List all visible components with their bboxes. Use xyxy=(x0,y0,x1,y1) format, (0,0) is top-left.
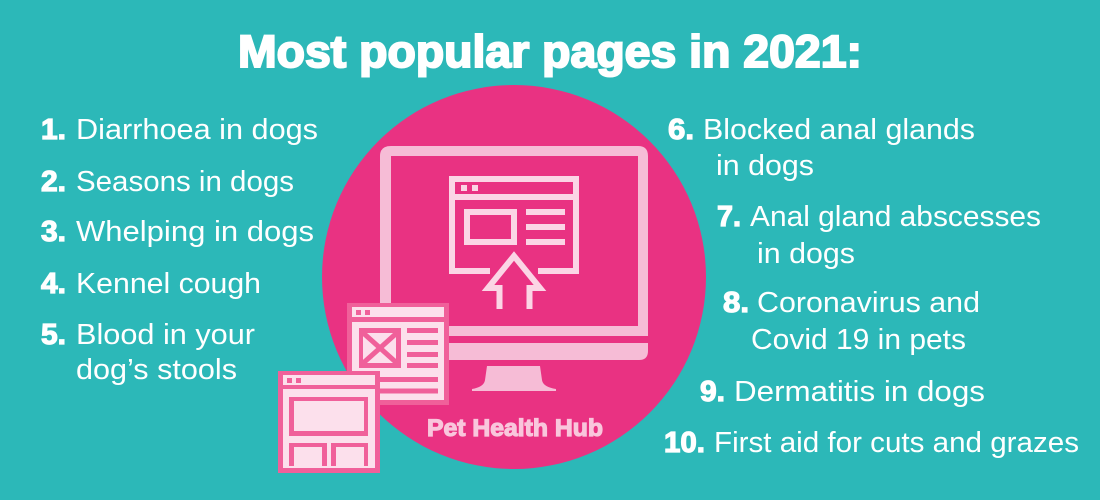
item 3: 3. xyxy=(41,216,66,248)
item 6: 6. xyxy=(668,114,694,146)
item 3: Whelping in dogs xyxy=(76,216,314,248)
item 7: Anal gland abscesses xyxy=(750,201,1041,233)
item 4: 4. xyxy=(41,268,66,300)
item 8: 8. xyxy=(723,287,749,319)
item 8: Coronavirus and xyxy=(757,287,980,319)
item 6: Blocked anal glands xyxy=(703,114,975,146)
item 10: First aid for cuts and grazes xyxy=(714,427,1079,459)
item 9: 9. xyxy=(700,376,725,408)
left list xyxy=(41,114,318,386)
icon: desktop monitor xyxy=(380,146,648,391)
item 7 xyxy=(717,201,1041,270)
item 1: Diarrhoea in dogs xyxy=(76,114,318,146)
item 5: dog’s stools xyxy=(76,354,237,386)
icon: small browser window with image and lines xyxy=(347,303,449,405)
title: Most popular pages in 2021: xyxy=(238,26,862,77)
item 5: Blood in your xyxy=(76,319,255,351)
item 7: in dogs xyxy=(757,238,855,270)
item 4: Kennel cough xyxy=(76,268,261,300)
icon: small browser window with layout xyxy=(278,371,380,473)
item 2: 2. xyxy=(41,166,66,198)
pink circle with illustration xyxy=(322,85,706,469)
item 9: Dermatitis in dogs xyxy=(734,376,985,408)
right list xyxy=(664,114,1079,459)
item 6: in dogs xyxy=(716,150,814,182)
item 5: 5. xyxy=(41,319,66,351)
item 8: Covid 19 in pets xyxy=(751,324,966,356)
item 6 xyxy=(668,114,975,182)
item 1: 1. xyxy=(41,114,66,146)
item 8 xyxy=(723,287,980,356)
item 10: 10. xyxy=(664,427,705,459)
item 2: Seasons in dogs xyxy=(76,166,294,198)
item 7: 7. xyxy=(717,201,741,233)
label: Pet Health Hub: Pet Health Hub xyxy=(427,415,603,442)
item 5 xyxy=(41,319,255,386)
icon: web page with upload arrow xyxy=(449,179,579,309)
